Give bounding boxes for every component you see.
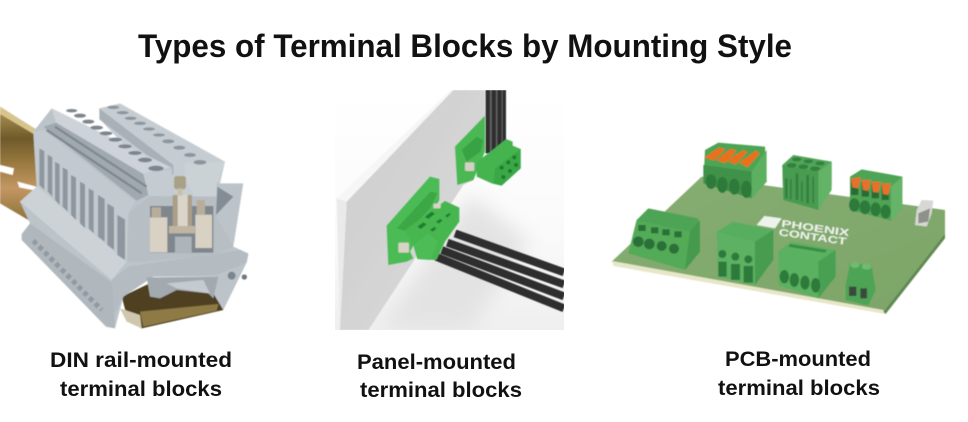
logo: Phoenix Contact: CONTACT bbox=[778, 227, 847, 248]
small two-pole connector bbox=[846, 262, 876, 306]
label: PCB-mounted bbox=[718, 347, 880, 400]
terminal cross-section bbox=[150, 176, 233, 253]
rail under the foot bbox=[120, 280, 223, 328]
logo: Phoenix Contact bbox=[757, 216, 850, 248]
orange-lever connector bbox=[703, 143, 767, 198]
bottom ledge bbox=[112, 250, 248, 313]
backdrop bbox=[335, 261, 564, 330]
label: PCB-mounted: terminal blocks bbox=[718, 376, 880, 400]
grooved zone bbox=[43, 123, 148, 201]
left angled connector bbox=[628, 208, 700, 270]
top holes bbox=[66, 109, 164, 171]
three-pole connector bbox=[717, 222, 773, 285]
panel wall bbox=[337, 90, 485, 330]
upper green connector bbox=[455, 116, 521, 186]
logo: Phoenix Contact: PHOENIX bbox=[781, 219, 850, 239]
label: DIN rail-mounted: DIN rail-mounted bbox=[50, 348, 232, 372]
rear terminal row bbox=[99, 103, 225, 198]
wall shadow on floor bbox=[394, 198, 526, 326]
image: panel-mounted terminal block bbox=[335, 90, 564, 330]
metal clip bbox=[915, 200, 933, 227]
label: Panel-mounted: Panel-mounted bbox=[357, 350, 516, 374]
tall six-hole connector bbox=[782, 155, 832, 210]
side wall bbox=[20, 130, 135, 280]
label: PCB-mounted: PCB-mounted bbox=[725, 347, 871, 371]
lower green connector bbox=[387, 177, 459, 265]
main housing bbox=[20, 108, 248, 328]
title: Types of Terminal Blocks by Mounting Style bbox=[138, 28, 792, 64]
lower wires bbox=[436, 233, 564, 308]
green circuit board bbox=[612, 177, 945, 314]
upper wires bbox=[486, 90, 506, 153]
label: DIN rail-mounted: terminal blocks bbox=[60, 377, 222, 401]
rail foot bbox=[147, 272, 247, 298]
four-pole connector bbox=[778, 242, 836, 298]
right orange connector bbox=[849, 169, 902, 221]
top strip bbox=[52, 108, 171, 174]
DIN rail bbox=[0, 107, 42, 220]
image: PCB-mounted terminal blocks on a board bbox=[612, 143, 945, 314]
label: Panel-mounted: terminal blocks bbox=[360, 378, 522, 402]
lower band bbox=[22, 223, 115, 328]
image: DIN rail-mounted terminal block bbox=[0, 103, 248, 328]
ribs bbox=[39, 148, 125, 260]
label: DIN rail-mounted bbox=[50, 348, 232, 401]
label: Panel-mounted bbox=[357, 350, 522, 402]
